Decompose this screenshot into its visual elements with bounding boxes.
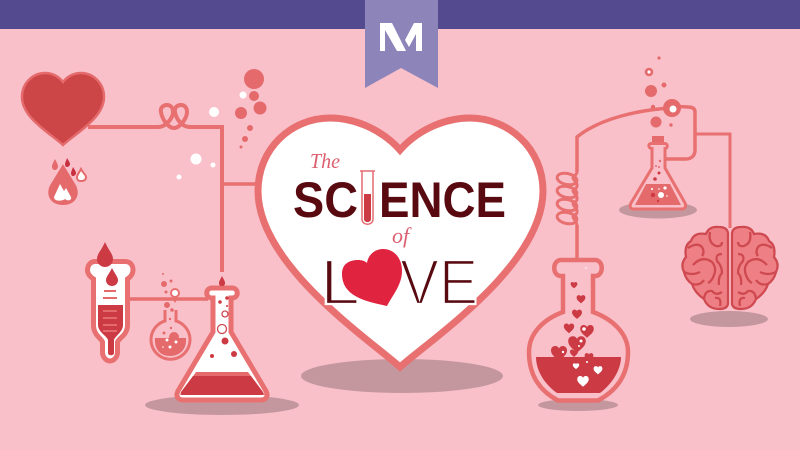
icon: test tube	[360, 171, 375, 224]
icon: syringe	[88, 242, 133, 361]
title: L: L	[320, 246, 360, 318]
brain left hemisphere	[682, 227, 728, 309]
left tubing	[88, 105, 260, 299]
icon: brain	[682, 227, 778, 309]
right tubing	[556, 106, 730, 258]
upper left bubbles	[176, 69, 266, 180]
title	[293, 149, 506, 318]
title: SC: SC	[293, 172, 358, 228]
title: The: The	[310, 149, 340, 173]
logo ribbon	[365, 0, 438, 88]
title: VE: VE	[400, 246, 478, 318]
brain right hemisphere	[732, 227, 778, 309]
upper right bubbles and node	[645, 56, 681, 128]
small round flask	[151, 273, 190, 359]
shadows	[145, 202, 768, 415]
big heart panel	[258, 118, 543, 367]
icon: blood drops	[49, 158, 86, 204]
conical flask upper right	[630, 136, 686, 209]
title: of: of	[392, 223, 412, 248]
heart as O in LOVE	[342, 249, 402, 306]
left heart	[22, 73, 104, 145]
title: ENCE: ENCE	[379, 172, 506, 228]
erlenmeyer flask left	[177, 276, 267, 400]
round flask right	[529, 260, 628, 400]
header bar	[0, 0, 800, 29]
rising hearts	[551, 282, 594, 361]
